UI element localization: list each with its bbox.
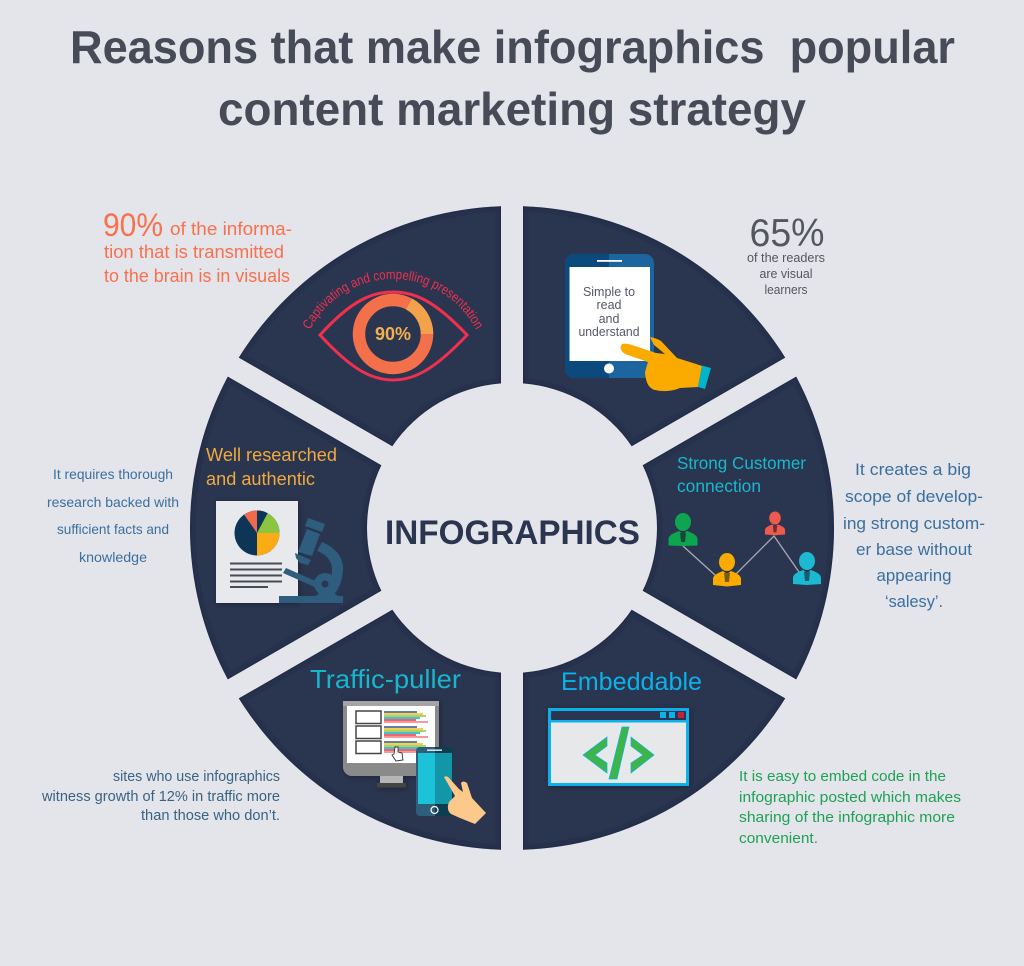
callout: 65% readers	[747, 212, 825, 297]
tablet text: Simple to	[583, 285, 635, 299]
callout: customer base: appearing	[876, 566, 952, 585]
callout: traffic growth: sites who use infographics	[113, 769, 280, 785]
callout: embed code	[739, 768, 961, 847]
callout: 90% visuals: to the brain is in visuals	[104, 266, 290, 286]
callout: 90% visuals	[103, 207, 292, 286]
callout: customer base: er base without	[856, 540, 972, 559]
icon: blue person	[793, 552, 821, 585]
callout: 65% readers: are visual	[760, 267, 812, 281]
callout: 65% readers: learners	[764, 283, 808, 297]
tablet text: read	[596, 298, 622, 312]
callout: customer base: ing strong custom-	[843, 514, 985, 533]
donut wheel sectors	[190, 206, 834, 850]
heading: Traffic-puller	[310, 664, 461, 694]
heading: Strong Customer	[677, 453, 806, 473]
callout: embed code: convenient.	[739, 830, 818, 847]
title: Reasons that make infographics popular	[70, 21, 955, 73]
heading	[206, 445, 337, 489]
callout: customer base: scope of develop-	[845, 487, 983, 506]
callout: traffic growth	[41, 769, 280, 824]
icon: tablet	[565, 254, 654, 378]
panel: captivating presentation eye	[303, 270, 482, 382]
callout: customer base: It creates a big	[855, 460, 971, 479]
callout: embed code: It is easy to embed code in the	[739, 768, 946, 785]
panel: traffic-puller	[310, 664, 486, 824]
icon: microscope	[279, 518, 343, 603]
panel: embeddable	[550, 668, 702, 784]
title: content marketing strategy	[218, 83, 806, 135]
callout: thorough research	[47, 466, 179, 565]
callout: thorough research: sufficient facts and	[57, 521, 169, 537]
center label: INFOGRAPHICS	[385, 514, 640, 552]
icon: browser window with code	[550, 710, 688, 784]
callout: 65% readers: of the readers	[747, 251, 825, 265]
callout: customer base	[843, 460, 985, 611]
icon: yellow person	[713, 553, 741, 586]
tablet text: understand	[578, 325, 640, 339]
callout: thorough research: It requires thorough	[53, 466, 173, 482]
network lines	[683, 536, 799, 575]
icon: red person	[765, 512, 785, 535]
callout: embed code: infographic posted which makes	[739, 789, 961, 806]
icon: pointing hand	[621, 337, 711, 391]
donut chart 90%	[359, 300, 427, 368]
callout: traffic growth: than those who don’t.	[141, 808, 280, 824]
callout: 90% visuals: of the informa-	[170, 219, 292, 239]
title	[70, 21, 955, 135]
heading: and authentic	[206, 469, 315, 489]
callout: 90% visuals: tion that is transmitted	[104, 242, 284, 262]
panel: strong customer connection	[668, 453, 821, 586]
heading: Well researched	[206, 445, 337, 465]
callout: embed code: sharing of the infographic more	[739, 809, 955, 826]
callout: traffic growth: witness growth of 12% in traffic more	[41, 789, 280, 805]
heading: connection	[677, 476, 761, 496]
callout: thorough research: knowledge	[79, 549, 147, 565]
tablet text: and	[599, 312, 619, 326]
icon: report page with pie chart	[216, 501, 298, 603]
callout: 65% readers: 65%	[750, 212, 824, 255]
tablet text	[578, 285, 640, 339]
curved heading: Captivating and compelling presentation	[303, 270, 482, 330]
panel: well researched and authentic	[206, 445, 343, 603]
heading	[677, 453, 806, 496]
callout: thorough research: research backed with	[47, 494, 179, 510]
heading: Embeddable	[561, 668, 702, 696]
icon: green person	[668, 513, 698, 546]
icon: desktop monitor	[343, 701, 439, 788]
icon: eye outline	[320, 292, 467, 380]
donut chart 90%: 90%	[375, 324, 411, 344]
callout: customer base: ‘salesy’.	[885, 592, 943, 611]
callout: 90% visuals: 90%	[103, 207, 163, 243]
panel: tablet simple to read	[565, 254, 711, 391]
icon: phone with hand	[416, 747, 486, 824]
